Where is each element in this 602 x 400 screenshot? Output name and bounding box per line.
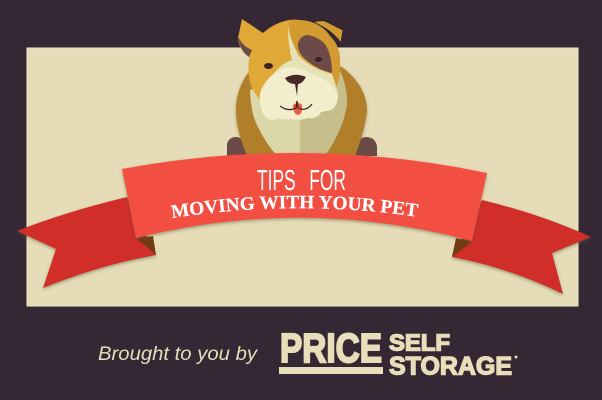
dog body: [236, 60, 367, 156]
ribbon left tail: [17, 197, 156, 288]
dog muzzle: [260, 67, 337, 120]
dog head: [248, 20, 340, 102]
dog eyes: [264, 57, 322, 69]
dog chest: [250, 70, 347, 156]
logo word price: PRICE: [280, 325, 382, 371]
heading: moving with your pet: MOVING WITH YOUR PET: [170, 196, 419, 218]
ribbon left fold: [136, 236, 156, 255]
ribbon right tail: [452, 200, 591, 294]
dog mouth: [280, 101, 312, 110]
ribbon centre band: [122, 153, 487, 241]
dog paws: [227, 137, 377, 156]
panel: cream background: [27, 48, 578, 306]
dog face blaze: [272, 27, 338, 100]
heading: tips for: FOR: [309, 165, 346, 197]
logo word self: SELF: [389, 330, 450, 356]
heading: tips for: TIPS: [257, 165, 296, 197]
illustration: bulldog: [227, 19, 377, 156]
logo registered mark: [514, 356, 518, 358]
dog left ear: [238, 19, 263, 57]
ribbon right fold: [452, 238, 472, 257]
logo word storage: STORAGE: [389, 352, 512, 380]
footer: brought to you by: Brought to you by: [98, 343, 258, 365]
logo: price self storage: [279, 325, 518, 380]
dog eye patch: [298, 35, 332, 73]
dog right ear: [313, 21, 343, 43]
dog tongue: [293, 103, 302, 115]
logo underline: [279, 367, 383, 374]
dog nose: [285, 75, 306, 96]
dog head right shading: [289, 20, 340, 90]
